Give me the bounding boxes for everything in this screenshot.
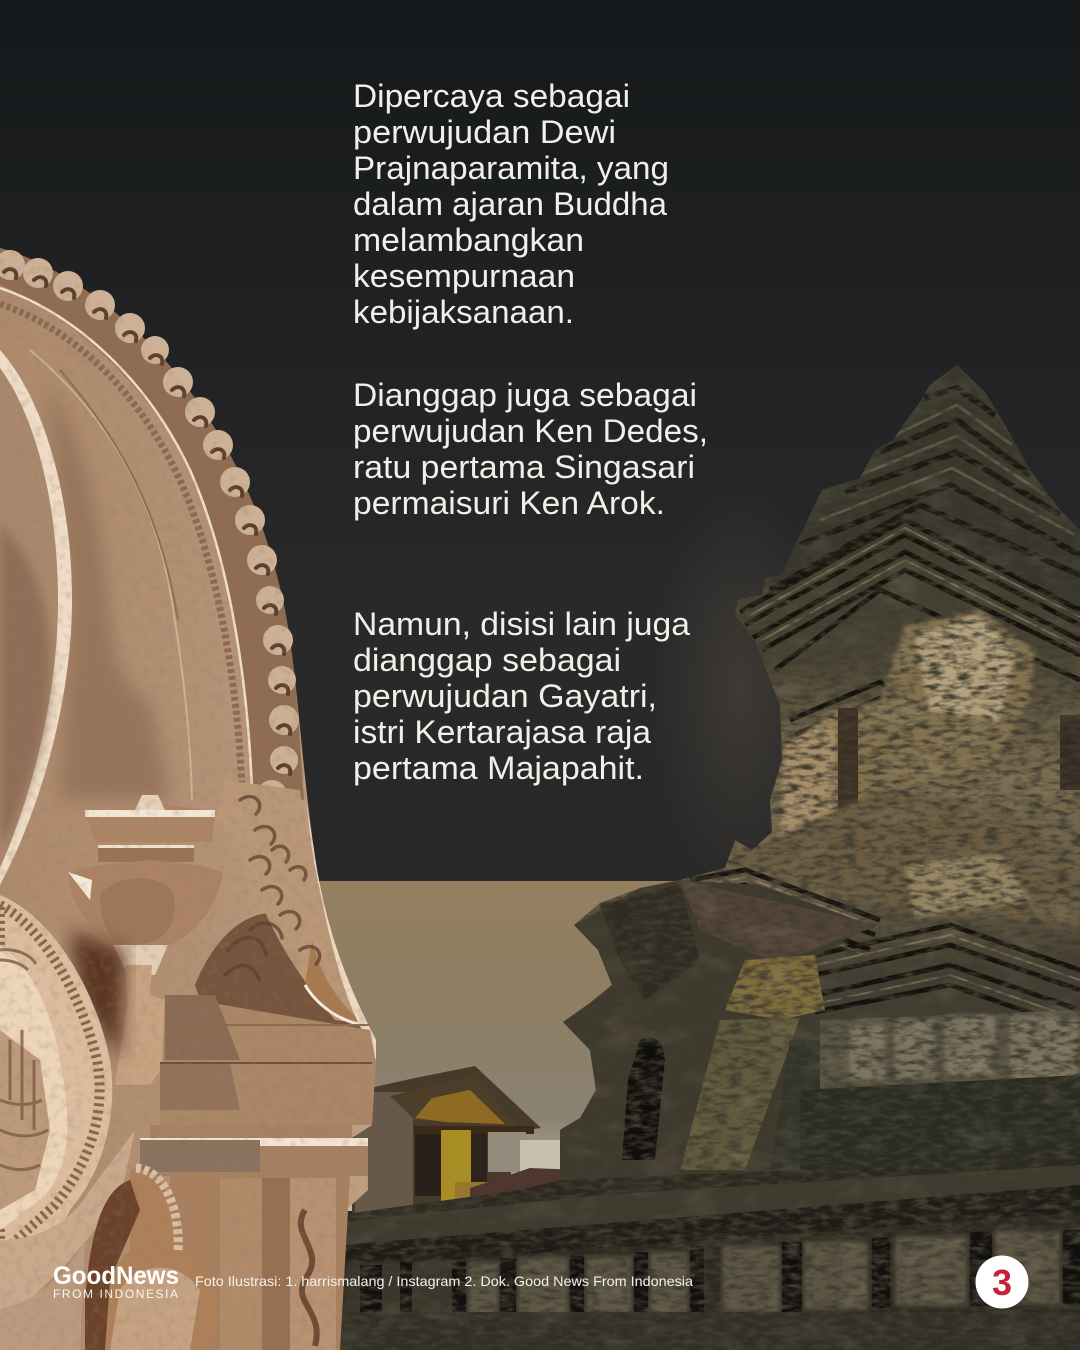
head halo disc: [0, 350, 72, 885]
halo outer body: [0, 248, 376, 1350]
sky glow behind temple: [650, 480, 830, 900]
halo shadow: [45, 380, 170, 800]
tower mid tier: [778, 790, 1080, 926]
tower lower base panels: [820, 1010, 1080, 1095]
tower cornice bands: [690, 520, 1080, 1030]
lotus flower: [68, 795, 223, 1085]
kendi vase: [100, 1168, 219, 1350]
photo: Candi temple tower: [330, 360, 1080, 1350]
text block: Prajnaparamita: melambangkan: [353, 222, 584, 258]
text block: Prajnaparamita: Prajnaparamita, yang: [353, 150, 669, 186]
tower upper roof shading: [764, 374, 1080, 620]
logo: GoodNews From Indonesia: [53, 1262, 179, 1301]
text block: Prajnaparamita: kebijaksanaan.: [353, 294, 574, 330]
text block: Gayatri: perwujudan Gayatri,: [353, 678, 657, 714]
text block: Prajnaparamita: dalam ajaran Buddha: [353, 186, 667, 222]
figure body: [0, 895, 112, 1290]
photo: dusk sky panel: [300, 881, 720, 1211]
tower left wing: [560, 880, 870, 1180]
text block: Prajnaparamita: Dipercaya sebagai: [353, 78, 630, 114]
text block: Ken Dedes: permaisuri Ken Arok.: [353, 485, 665, 521]
tower roof tier ledges: [770, 388, 1080, 590]
text block: Prajnaparamita: [353, 78, 669, 330]
tower lit stone block: [780, 610, 1035, 840]
pedestal cornice: [160, 995, 376, 1125]
text block: Prajnaparamita: perwujudan Dewi: [353, 114, 616, 150]
wall gaps: [360, 1230, 1080, 1317]
photo: stone statue halo: [0, 248, 380, 1350]
shadow behind lotus stem: [70, 930, 125, 1060]
tower stone texture: [330, 360, 1080, 1350]
text block: Ken Dedes: [353, 377, 708, 521]
text block: Gayatri: Namun, disisi lain juga: [353, 606, 690, 642]
lotus stem: [115, 965, 168, 1085]
text block: Ken Dedes: perwujudan Ken Dedes,: [353, 413, 708, 449]
text block: Gayatri: dianggap sebagai: [353, 642, 621, 678]
photo credit: Foto Ilustrasi: 1. harrismalang / Instagram 2. Dok. Good News From Indonesia: [195, 1273, 693, 1289]
page number badge: 3: [992, 1262, 1012, 1303]
text block: Ken Dedes: ratu pertama Singasari: [353, 449, 695, 485]
figure jewelry: [0, 950, 48, 1170]
text block: Gayatri: [353, 606, 690, 786]
logo: GoodNews From Indonesia: FROM INDONESIA: [53, 1287, 178, 1301]
statue stone texture: [0, 248, 380, 1350]
photo: house behind the wall: [352, 1066, 580, 1215]
text block: Gayatri: istri Kertarajasa raja: [353, 714, 651, 750]
halo rim line and key pattern: [0, 288, 252, 790]
text block: Prajnaparamita: kesempurnaan: [353, 258, 575, 294]
halo inner rings: [30, 350, 192, 800]
halo flame ornament band: [0, 248, 304, 800]
text block: Ken Dedes: Dianggap juga sebagai: [353, 377, 697, 413]
page number badge: [976, 1256, 1028, 1308]
tower niche: [622, 1038, 665, 1160]
wall pillars: [345, 1232, 1060, 1316]
scroll ornament lower right: [195, 913, 365, 1030]
logo: GoodNews From Indonesia: GoodNews: [53, 1262, 179, 1290]
text block: Gayatri: pertama Majapahit.: [353, 750, 644, 786]
